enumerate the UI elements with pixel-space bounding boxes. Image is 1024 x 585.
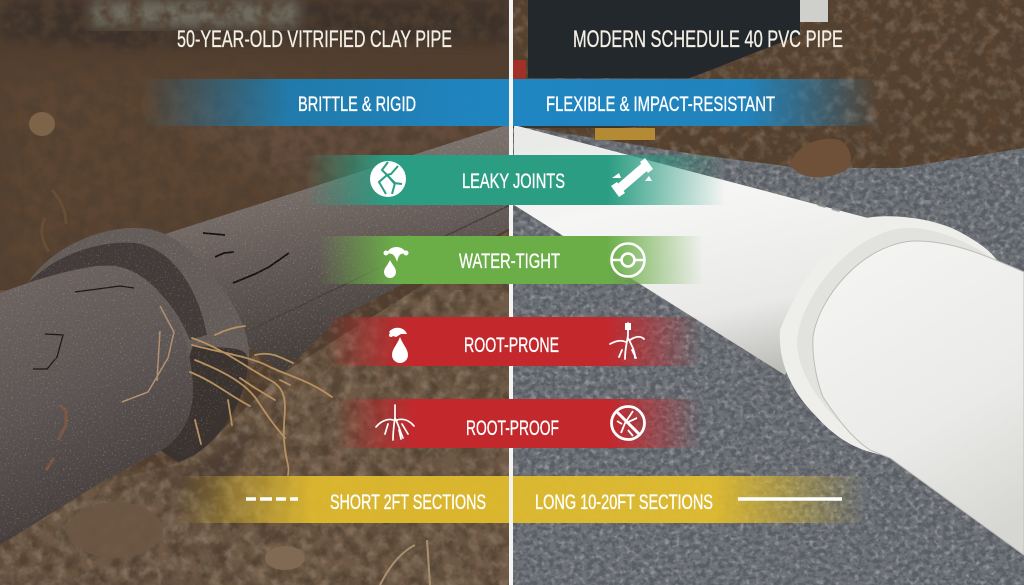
icon: dripping joint [384,247,408,278]
centre divider line [509,0,513,585]
banner: leaky joints [305,155,725,205]
banner: root-proof: ROOT-PROOF [466,417,559,440]
soil bank behind gravel [512,0,1024,175]
tree roots through joint [190,326,332,475]
PVC pipe, front section [813,241,1024,555]
banner: root-prone: ROOT-PRONE [464,334,559,357]
icon: no roots symbol [612,406,644,440]
icon: water drop with cap [389,328,408,363]
banner: section length: SHORT 2FT SECTIONS [330,491,486,514]
dark building background [528,0,800,78]
banner: strength comparison: FLEXIBLE & IMPACT-RESISTANT [546,93,775,116]
icon: cracked disc [370,161,406,197]
icon: sealed ring [612,244,644,276]
clay pipe, collar joint [28,228,249,462]
banner: section length [175,476,865,523]
icon: short dashes [246,497,298,501]
icon: root [610,323,644,359]
banner: water-tight: WATER-TIGHT [459,250,560,273]
icon: root [376,405,414,440]
PVC pipe, collar joint [780,216,998,458]
heading: PVC pipe: MODERN SCHEDULE 40 PVC PIPE [573,26,843,53]
banner: strength comparison: BRITTLE & RIGID [298,93,416,116]
banner: water-tight [318,236,703,284]
banner: root-prone [325,317,700,366]
clay pipe surface speckle [0,120,510,550]
banner: root-proof [335,399,700,448]
clay pipe, front section [0,266,193,545]
panel: PVC pipe photo side [512,0,1024,585]
heading: clay pipe: 50-YEAR-OLD VITRIFIED CLAY PIPE [177,26,452,53]
banner: leaky joints: LEAKY JOINTS [462,170,565,193]
icon: long line [738,497,842,501]
clay pipe, rear section [165,124,510,373]
banner: strength comparison [140,79,880,126]
rock on soil [790,139,851,177]
panel: clay pipe photo side [0,0,510,585]
PVC pipe, rear section [514,125,868,375]
icon: broken pipe [611,158,653,197]
banner: section length: LONG 10-20FT SECTIONS [535,491,713,514]
